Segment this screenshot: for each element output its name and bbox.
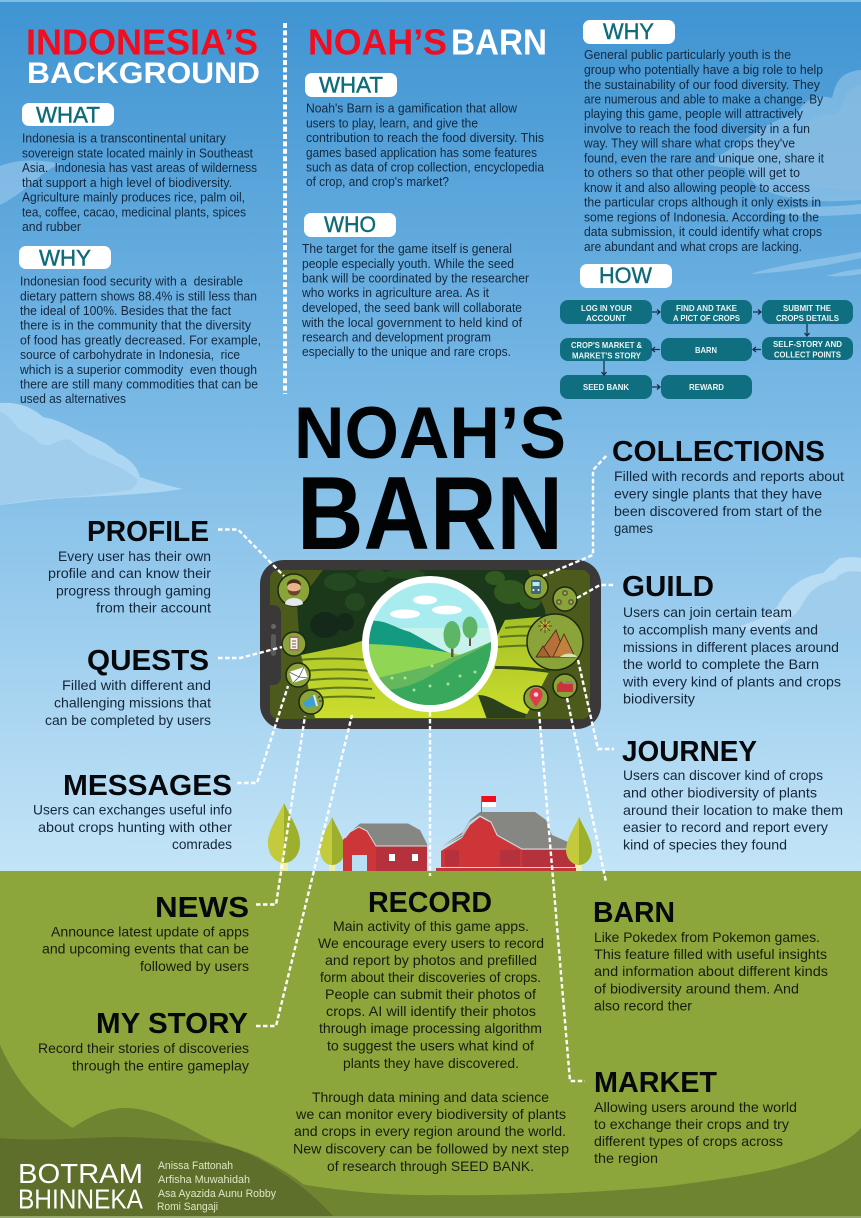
feature: record: We encourage every users to record [318, 935, 544, 951]
feature: profile [48, 516, 211, 616]
feature: guild: with every kind of plants and crops [622, 674, 841, 690]
pill: how [580, 263, 672, 288]
text: why: there are still many commodities that can be [20, 378, 258, 392]
step: find: A PICT OF CROPS [673, 313, 740, 323]
feature: messages [33, 770, 232, 852]
feature: market [594, 1067, 797, 1166]
feature: collections: COLLECTIONS [612, 436, 825, 468]
feature: market: the region [594, 1150, 658, 1166]
feature: market: MARKET [594, 1067, 717, 1099]
text: why: way. They will share what crops they've [583, 136, 795, 150]
feature: guild: the world to complete the Barn [623, 656, 819, 672]
text: what: Indonesia is a transcontinental unitary [22, 132, 227, 146]
pill: why [583, 19, 675, 44]
feature: barn: BARN [593, 897, 675, 929]
feature: guild: biodiversity [623, 690, 695, 706]
text: what: such as data of crop collection, encyclopedia [306, 160, 544, 174]
text: why: the ideal of 100%. Besides that the fact [20, 304, 232, 318]
feature: journey: easier to record and report every [623, 819, 828, 835]
text: what: games based application has some features [306, 146, 537, 160]
feature: barn: and information about different kinds [594, 963, 828, 979]
icon: barn [553, 674, 577, 698]
step: submit [762, 300, 853, 324]
feature: news: NEWS [155, 892, 249, 924]
text: why: which is a superior commodity even though [19, 363, 257, 377]
feature: record: and crops in every region around the world. [294, 1123, 566, 1139]
step: market: CROP'S MARKET & [571, 340, 642, 350]
feature: barn: Like Pokedex from Pokemon games. [594, 929, 820, 945]
pill: how: HOW [599, 263, 652, 288]
text: why [19, 274, 261, 406]
text: who: bank will be coordinated by the researcher [302, 272, 529, 286]
feature: record: of research through SEED BANK. [327, 1158, 534, 1174]
team members: Arfisha Muwahidah [158, 1174, 250, 1186]
text: why: group who potentially have a big role to help [584, 63, 823, 77]
text: why: Indonesian food security with a desirable [20, 274, 243, 288]
feature: record: crops. AI will identify their photos [326, 1003, 536, 1019]
flowchart: how [560, 300, 853, 399]
feature: journey [622, 736, 843, 852]
feature: market: to exchange their crops and try [594, 1116, 789, 1132]
big barn [436, 796, 576, 871]
feature: news: followed by users [140, 958, 249, 974]
feature: record: Through data mining and data science [312, 1089, 549, 1105]
feature: record: Main activity of this game apps. [333, 918, 529, 934]
pill: what: WHAT [36, 102, 100, 128]
step: self-story [762, 337, 853, 360]
step: find: FIND AND TAKE [676, 303, 737, 313]
icon: quests clipboard [282, 632, 306, 656]
feature: guild: Users can join certain team [623, 604, 792, 620]
text: why: found, even the rare and unique one, share it [584, 152, 824, 166]
text: why: of food has greatly decreased. For example, [20, 334, 261, 348]
text: what: Agriculture mainly produces rice, palm oil, [22, 190, 245, 204]
connector lines [218, 455, 615, 1081]
text: why [583, 48, 824, 254]
text: who: developed, the seed bank will collaborate [302, 301, 522, 315]
step: reward [661, 375, 752, 399]
phone mockup [260, 560, 601, 729]
text: why: used as alternatives [20, 392, 126, 406]
text: why: data submission, it could identify what crops [584, 225, 822, 239]
feature: my story: through the entire gameplay [72, 1058, 249, 1074]
heading: Noah's Barn: BARN [451, 22, 547, 62]
icon: journey mountains [527, 614, 583, 670]
pill: who: WHO [324, 212, 376, 237]
text: why: General public particularly youth is the [584, 48, 791, 62]
feature: market: Allowing users around the world [594, 1099, 797, 1115]
feature: collections: games [614, 520, 653, 536]
step: log in: LOG IN YOUR [581, 303, 632, 313]
text: why: the particular crops although it only exists in [584, 196, 821, 210]
step: log in [560, 300, 652, 324]
feature: messages: Users can exchanges useful info [33, 802, 232, 818]
feature: messages: MESSAGES [63, 770, 232, 802]
text: why: know it and also allowing people to access [584, 181, 810, 195]
feature: guild: GUILD [622, 571, 714, 603]
text: what: Asia. Indonesia has vast areas of wilderness [22, 161, 257, 175]
feature: news [42, 892, 249, 974]
feature: messages: comrades [172, 836, 232, 852]
feature: collections [612, 436, 844, 536]
text: what: of crop, and crop's market? [306, 175, 449, 189]
text: who: especially to the unique and rare crops. [302, 345, 511, 359]
team logo: Botram Bhinneka: BOTRAM [18, 1158, 143, 1189]
icon: collections [524, 575, 548, 599]
text: who: with the local government to held kind of [301, 316, 523, 330]
feature: journey: JOURNEY [622, 736, 757, 768]
step: submit: SUBMIT THE [783, 303, 831, 313]
text: what: tea, coffee, cacao, medicinal plants, spices [22, 206, 246, 220]
step: submit: CROPS DETAILS [776, 313, 839, 323]
text: why: source of carbohydrate in Indonesia, rice [20, 348, 240, 362]
team members: Asa Ayazida Aunu Robby [158, 1188, 276, 1200]
small barn [343, 824, 428, 871]
text: what: contribution to reach the food diversity. This [306, 131, 544, 145]
text: why: to others so that other people will get to [584, 166, 800, 180]
pill: why: WHY [603, 19, 654, 44]
text: why: involve to reach the food diversity in a fun [584, 122, 810, 136]
icon: profile [278, 574, 310, 606]
step: barn [661, 338, 752, 361]
feature: messages: about crops hunting with other [38, 819, 232, 835]
feature: barn [593, 897, 828, 1014]
flag [482, 796, 496, 813]
text: who: people especially youth. While the seed [302, 257, 514, 271]
feature: profile: PROFILE [87, 516, 209, 548]
feature: record: People can submit their photos of [325, 986, 536, 1002]
panel: why and how [560, 19, 853, 399]
feature: record: plants they have discovered. [343, 1055, 519, 1071]
panel: Indonesia's background [19, 22, 261, 406]
feature: news: Announce latest update of apps [51, 924, 249, 940]
main title [294, 393, 566, 572]
team members: Romi Sangaji [157, 1201, 218, 1213]
team logo: Botram Bhinneka: BHINNEKA [18, 1184, 143, 1214]
text: why: the sustainability of our food diversity. They [584, 78, 821, 92]
text: why: playing this game, people will attractively [584, 107, 804, 121]
photo: rice terraces [297, 570, 550, 718]
feature: collections: Filled with records and reports about [614, 468, 844, 484]
text: who [301, 242, 529, 359]
divider [283, 23, 287, 394]
heading: Noah's Barn: NOAH’S [308, 22, 447, 62]
feature: guild [622, 571, 841, 706]
main title: BARN [297, 456, 563, 572]
feature: profile: progress through gaming [56, 582, 211, 598]
text: why: are numerous and able to make a change. By [584, 92, 824, 106]
feature: journey: Users can discover kind of crops [623, 767, 823, 783]
icon: guild [553, 587, 577, 611]
feature: barn: also record ther [594, 998, 692, 1014]
feature: record: and report by photos and prefilled [325, 952, 537, 968]
step: self-story: SELF-STORY AND [773, 339, 842, 349]
feature: journey: and other biodiversity of plants [623, 784, 817, 800]
feature: my story: Record their stories of discoveries [38, 1040, 249, 1056]
tree: left [268, 803, 300, 871]
team members: Anissa Fattonah [158, 1160, 233, 1172]
main title: NOAH’S [294, 393, 566, 474]
illustration: hills circle [362, 576, 498, 712]
text: what: and rubber [22, 220, 81, 234]
arrows [602, 310, 810, 390]
icon: messages envelope [286, 663, 310, 687]
feature: profile: profile and can know their [48, 565, 211, 581]
pill: why [19, 246, 111, 270]
step: seed bank: SEED BANK [583, 382, 630, 392]
feature: quests: challenging missions that [54, 694, 211, 710]
feature: barn: This feature filled with useful insights [594, 946, 827, 962]
trees [444, 616, 478, 657]
feature: my story [38, 1008, 249, 1074]
barns and trees scene [268, 796, 592, 871]
step: log in: ACCOUNT [586, 313, 627, 323]
feature: record [293, 887, 569, 1174]
heading: Indonesia's background [26, 22, 260, 90]
feature: quests: can be completed by users [45, 712, 211, 728]
text: why: dietary pattern shows 88.4% is still less than [20, 290, 257, 304]
icon: location pin [524, 686, 548, 710]
heading: Noah's Barn [308, 22, 547, 62]
feature: guild: to accomplish many events and [623, 622, 818, 638]
text: who: who works in agriculture area. As it [301, 286, 490, 300]
feature: record: through image processing algorithm [319, 1020, 542, 1036]
pill: what [305, 72, 397, 98]
text: what: that support a high level of biodiversity. [22, 176, 232, 190]
feature: my story: MY STORY [96, 1008, 248, 1040]
clouds [0, 70, 861, 630]
panel: Noah's Barn [301, 22, 547, 359]
step: market: MARKET'S STORY [572, 350, 641, 360]
step: self-story: COLLECT POINTS [774, 350, 841, 360]
pill: why: WHY [39, 246, 91, 270]
step: find [661, 300, 752, 324]
step: barn: BARN [695, 345, 717, 355]
feature: record: RECORD [368, 887, 492, 919]
feature: collections: been discovered from start of the [614, 503, 822, 519]
step: reward: REWARD [689, 382, 724, 392]
feature: quests: Filled with different and [62, 677, 211, 693]
text: who: The target for the game itself is general [302, 242, 512, 256]
feature: barn: of biodiversity around them. And [594, 980, 799, 996]
text: what [22, 132, 257, 234]
feature: profile: Every user has their own [58, 548, 211, 564]
feature: news: and upcoming events that can be [42, 940, 249, 956]
feature: profile: from their account [96, 600, 211, 616]
team logo: Botram Bhinneka [18, 1158, 143, 1214]
feature: market: different types of crops across [594, 1133, 783, 1149]
text: what [306, 102, 544, 189]
feature: journey: kind of species they found [623, 836, 787, 852]
pill: who [304, 212, 396, 237]
feature: quests: QUESTS [87, 645, 209, 677]
pill: what [22, 102, 114, 128]
team members [157, 1160, 276, 1213]
heading: Indonesia's background: BACKGROUND [27, 57, 260, 90]
heading: Indonesia's background: INDONESIA’S [26, 22, 258, 62]
step: market [560, 338, 652, 361]
text: what: Noah's Barn is a gamification that allow [306, 102, 518, 116]
tree: right [566, 817, 592, 871]
feature: guild: missions in different places around [623, 639, 839, 655]
text: why: some regions of Indonesia. According to the [584, 210, 819, 224]
feature: record: to suggest the users what kind of [327, 1038, 534, 1054]
icon: news megaphone [299, 690, 323, 714]
feature: record: form about their discoveries of crops. [320, 969, 541, 985]
text: what: sovereign state located mainly in Southeast [22, 146, 253, 160]
feature: record: we can monitor every biodiversity of plants [295, 1106, 566, 1122]
feature: collections: every single plants that they have [614, 486, 822, 502]
feature: quests [45, 645, 211, 728]
step: seed bank [560, 375, 652, 399]
tree: middle [320, 817, 345, 871]
feature: journey: around their location to make them [623, 802, 843, 818]
pill: what: WHAT [319, 72, 383, 98]
feature: record: New discovery can be followed by next step [293, 1140, 569, 1156]
text: who: research and development program [302, 330, 491, 344]
text: why: there is in the community that the diversity [20, 318, 252, 332]
text: why: are abundant and what crops are lacking. [584, 240, 802, 254]
text: what: users to play, learn, and give the [306, 116, 478, 130]
